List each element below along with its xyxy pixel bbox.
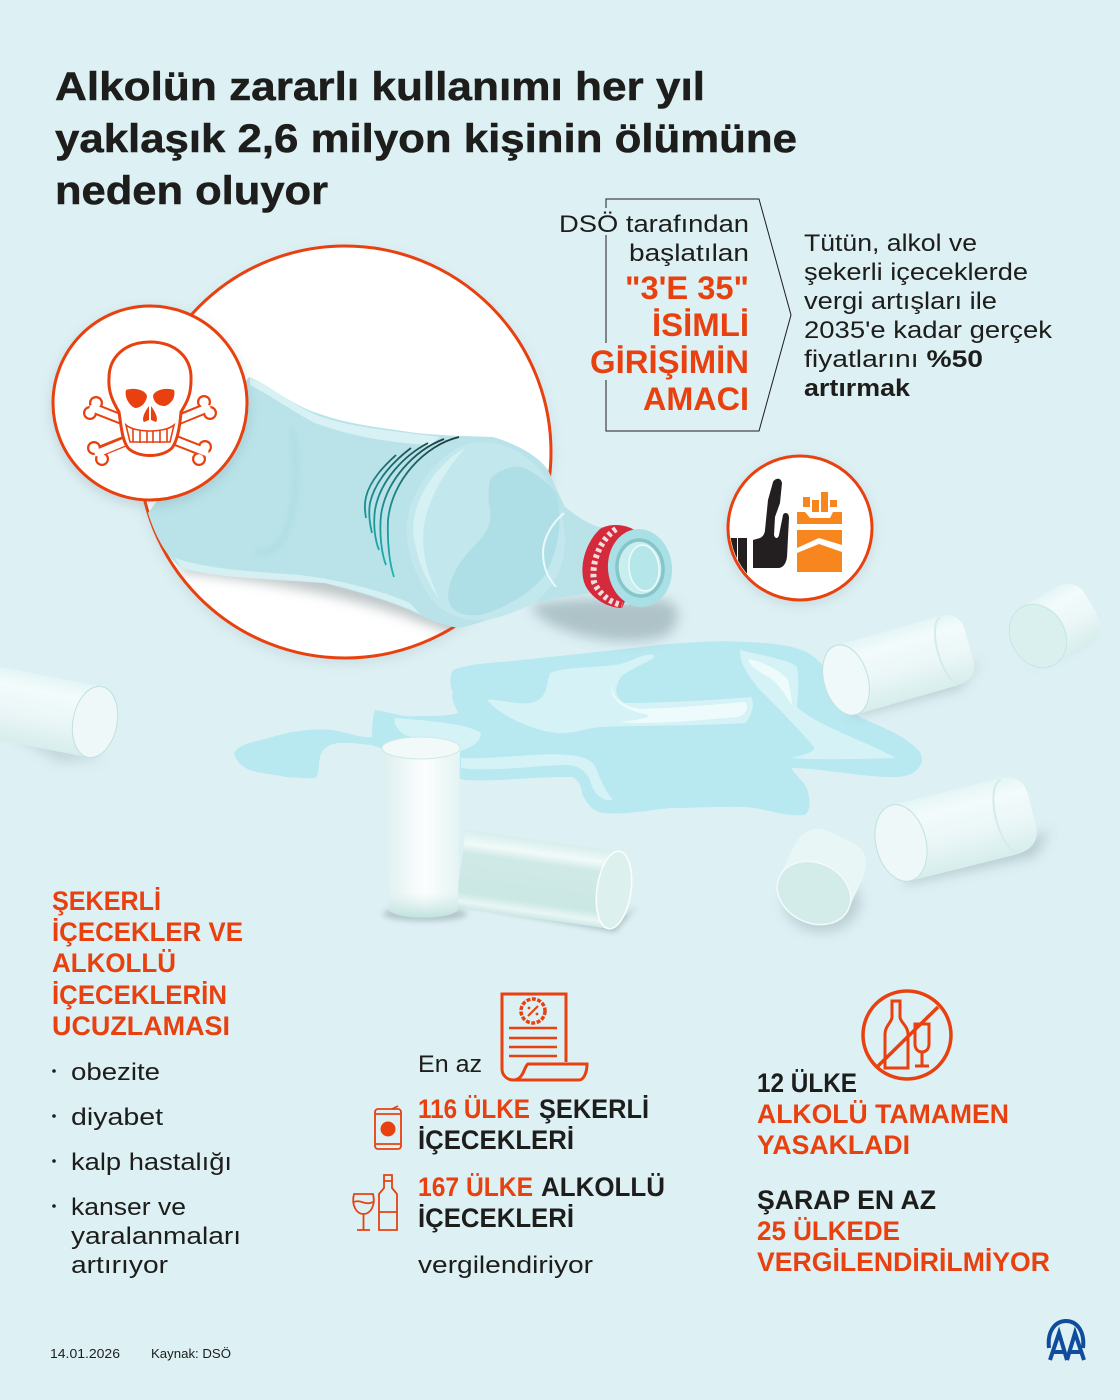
icon: no alcohol — [863, 991, 951, 1079]
heading: cheapening drinks: UCUZLAMASI — [52, 1011, 230, 1041]
title: Alkolün zararlı kullanımı her yıl — [55, 65, 705, 109]
text: tax stats — [418, 1051, 665, 1279]
label crease — [255, 428, 296, 553]
list of health effects — [52, 1059, 241, 1279]
skull nose — [143, 406, 157, 422]
bottle shadow inside circle — [175, 563, 452, 635]
text: bans: YASAKLADI — [757, 1130, 910, 1160]
glass: lying beside standing glass — [455, 830, 638, 932]
bottle lying on its side — [148, 377, 678, 641]
DSÖ text block — [559, 199, 791, 431]
DSÖ text block: AMACI — [643, 381, 749, 417]
heading: cheapening drinks: İÇECEKLER VE — [52, 917, 243, 947]
icon: hand stop and cigarette pack — [727, 456, 873, 604]
glass: top right lying — [815, 610, 980, 721]
icon: soda can — [375, 1106, 401, 1149]
logo: AA — [1049, 1321, 1084, 1360]
crossed bones — [83, 395, 217, 466]
list of health effects: obezite — [71, 1059, 160, 1086]
glass: standing — [382, 737, 467, 921]
text: bans: 25 ÜLKEDE — [757, 1216, 900, 1246]
bottle lower edge highlight — [175, 558, 420, 614]
bottle shoulder — [407, 443, 565, 620]
tax goal text: Tütün, alkol ve — [804, 230, 977, 257]
shoulder glint — [413, 448, 465, 600]
heading: cheapening drinks: ALKOLLÜ — [52, 948, 176, 978]
footer date and source — [50, 1346, 231, 1361]
red collar — [582, 525, 640, 608]
bottle upper edge highlight — [250, 378, 440, 445]
bottle body — [148, 377, 660, 628]
title — [55, 65, 797, 213]
bottle shadow on ground — [530, 599, 678, 641]
hand — [730, 479, 789, 574]
list of health effects: diyabet — [71, 1104, 163, 1131]
white circle with orange outline — [138, 246, 552, 663]
footer date and source: Kaynak: DSÖ — [151, 1346, 231, 1361]
title: neden oluyor — [55, 169, 328, 213]
spilled liquid puddle — [234, 641, 922, 815]
neck highlight — [543, 513, 564, 587]
list of health effects: artırıyor — [71, 1252, 168, 1279]
DSÖ text block: DSÖ tarafından — [559, 211, 749, 238]
text: bans — [757, 1068, 1050, 1277]
text: bans: ALKOLÜ TAMAMEN — [757, 1099, 1009, 1129]
DSÖ text block: İSİMLİ — [652, 307, 749, 343]
heading: cheapening drinks: ŞEKERLİ — [52, 886, 161, 916]
text: tax stats: İÇECEKLERİ — [418, 1203, 574, 1233]
tax goal text: 2035'e kadar gerçek — [804, 317, 1053, 344]
heading: cheapening drinks: İÇECEKLERİN — [52, 980, 227, 1010]
tax goal text: şekerli içeceklerde — [804, 259, 1028, 286]
list of health effects: kalp hastalığı — [71, 1149, 232, 1176]
skull — [109, 342, 191, 456]
bottle mouth — [604, 526, 676, 610]
text: bans: 12 ÜLKE — [757, 1068, 857, 1098]
DSÖ text block: başlatılan — [629, 240, 749, 267]
shoulder inner shade — [448, 467, 560, 615]
heading: cheapening drinks — [52, 886, 243, 1041]
text: tax stats: En az — [418, 1051, 482, 1078]
mouth ring — [614, 538, 666, 598]
tax goal text: vergi artışları ile — [804, 288, 997, 315]
tax goal text: fiyatlarını %50 — [804, 346, 983, 373]
text: tax stats: 116 ÜLKE — [418, 1094, 530, 1124]
footer date and source: 14.01.2026 — [50, 1346, 120, 1361]
text: tax stats: ALKOLLÜ — [541, 1172, 665, 1202]
bracket arrow — [606, 199, 791, 431]
text: tax stats: ŞEKERLİ — [539, 1094, 649, 1124]
label stripes — [365, 437, 459, 577]
text: tax stats: 167 ÜLKE — [418, 1172, 533, 1202]
text: bans: VERGİLENDİRİLMİYOR — [757, 1247, 1050, 1277]
skull teeth — [126, 425, 174, 443]
collar notches — [593, 529, 622, 605]
DSÖ text block: "3'E 35" — [625, 270, 749, 306]
icon: wine glass and bottle — [353, 1175, 397, 1230]
text: tax stats: İÇECEKLERİ — [418, 1125, 574, 1155]
skull eyes — [126, 389, 174, 408]
title: yaklaşık 2,6 milyon kişinin ölümüne — [55, 117, 797, 161]
tax goal text: artırmak — [804, 375, 911, 402]
glass: far right small — [998, 576, 1108, 678]
text: bans: ŞARAP EN AZ — [757, 1185, 936, 1215]
mouth opening — [627, 544, 661, 592]
icon: tax document — [502, 994, 587, 1080]
list of health effects: kanser ve — [71, 1194, 186, 1221]
list of health effects: yaralanmaları — [71, 1223, 241, 1250]
cigarette pack — [797, 492, 842, 572]
tax goal text — [804, 230, 1053, 402]
text: tax stats: vergilendiriyor — [418, 1252, 593, 1279]
glass: far left lying — [0, 662, 123, 762]
icon: skull and crossbones circle — [52, 306, 248, 505]
puddle highlights — [395, 650, 895, 800]
glass: right lying — [867, 772, 1050, 887]
glass: small tipped — [767, 821, 875, 936]
DSÖ text block: GİRİŞİMİN — [590, 344, 749, 380]
